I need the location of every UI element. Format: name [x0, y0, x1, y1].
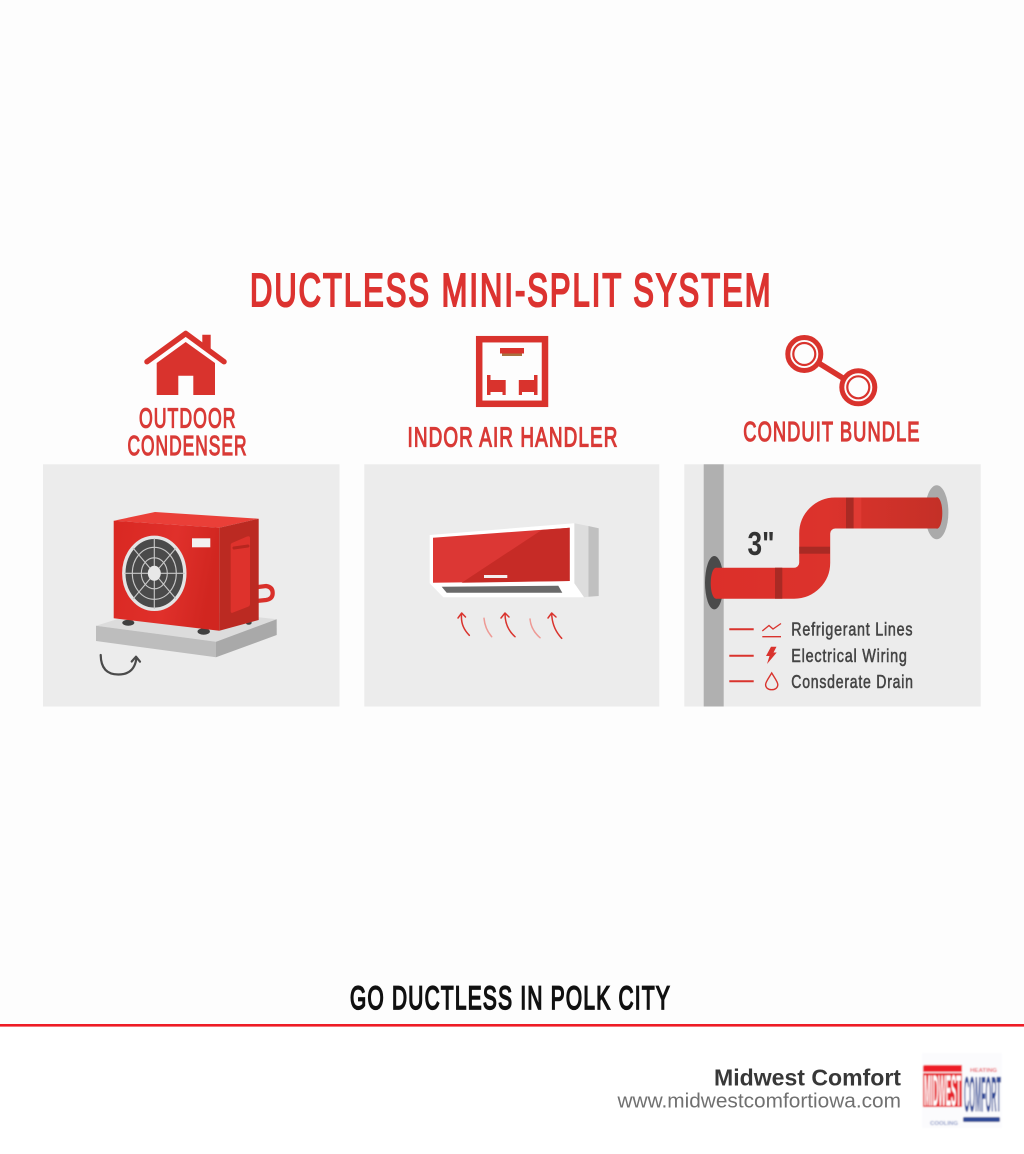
footer rule	[0, 1024, 1024, 1027]
panel: conduit bundle	[684, 464, 981, 706]
panel: indoor air handler	[364, 464, 659, 706]
wall penetrations	[705, 485, 948, 609]
panel background	[364, 464, 659, 706]
heading: conduit bundle: CONDUIT BUNDLE	[743, 416, 920, 447]
heading: outdoor condenser	[128, 402, 248, 461]
legend: condensate drain: Consderate Drain	[791, 671, 914, 692]
airflow arrows	[458, 613, 562, 638]
legend: condensate drain	[729, 671, 914, 692]
heading: indoor air handler: INDOR AIR HANDLER	[408, 422, 618, 452]
logo: Midwest Comfort	[922, 1053, 1002, 1128]
heading: outdoor condenser: OUTDOOR	[139, 402, 236, 434]
legend: electrical wiring	[729, 645, 908, 666]
company name: Midwest Comfort	[714, 1065, 901, 1091]
air vent	[442, 586, 562, 593]
concrete pad	[96, 606, 277, 657]
panel: outdoor condenser	[43, 464, 340, 706]
company website: www.midwestcomfortiowa.com	[616, 1090, 901, 1112]
legend: refrigerant lines	[729, 619, 913, 640]
icon: room with air handler	[479, 339, 545, 404]
panel background	[43, 464, 340, 706]
footer background	[0, 1026, 1024, 1154]
diameter label: 3"	[748, 525, 774, 562]
condenser feet	[122, 620, 252, 635]
conduit pipe	[711, 497, 942, 599]
condenser cabinet	[114, 512, 259, 631]
panel background	[684, 464, 981, 706]
call to action: GO DUCTLESS IN POLK CITY	[350, 980, 671, 1016]
legend: electrical wiring: Electrical Wiring	[791, 645, 908, 666]
logo: Midwest Comfort: COOLING	[930, 1121, 958, 1127]
title: DUCTLESS MINI-SPLIT SYSTEM	[250, 264, 772, 316]
wall section	[704, 464, 724, 706]
fan grille	[124, 537, 185, 609]
icon: house	[147, 334, 224, 395]
icon: conduit link	[788, 338, 875, 404]
legend: refrigerant lines: Refrigerant Lines	[791, 619, 913, 640]
wall unit housing	[430, 523, 599, 597]
red front panel	[433, 528, 570, 583]
logo: Midwest Comfort: HEATING	[970, 1068, 997, 1074]
refrigerant pipe loop	[250, 586, 273, 602]
heading: outdoor condenser: CONDENSER	[128, 430, 248, 461]
icon: rotation arrow	[101, 655, 140, 674]
